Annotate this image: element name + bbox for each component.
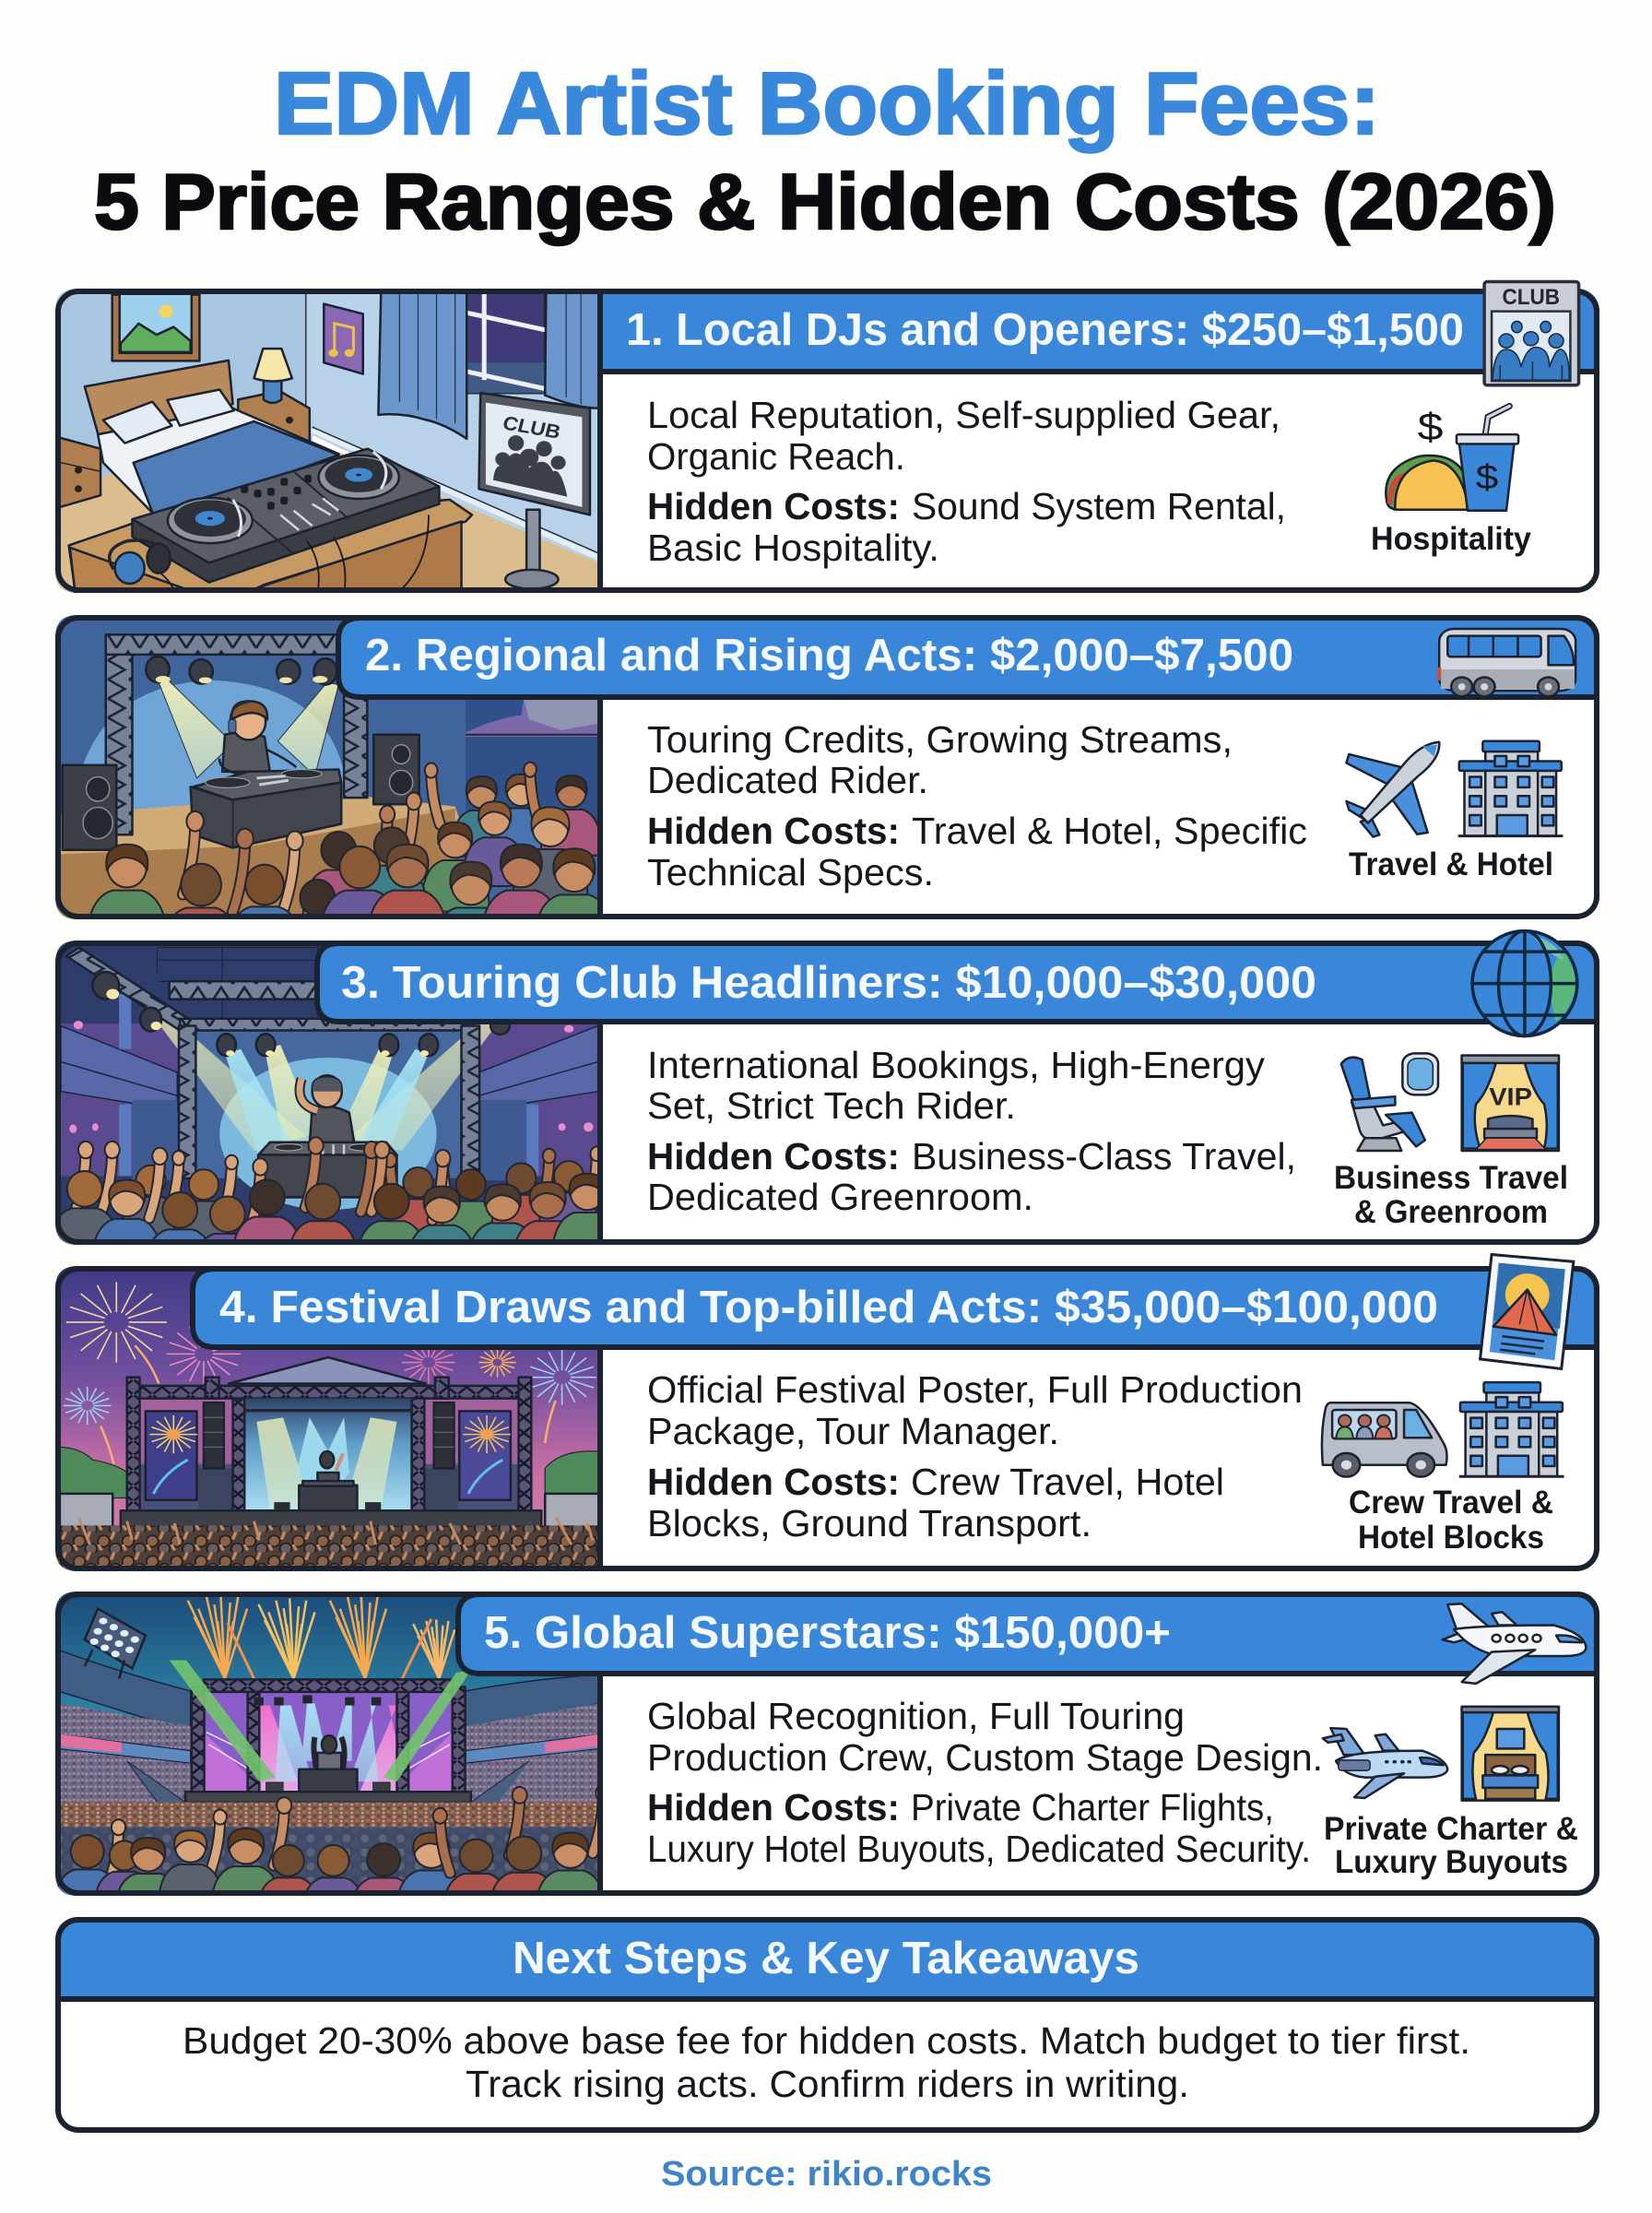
icon: VIP greenroom: VIP <box>1489 1083 1532 1111</box>
label: crew travel and hotel blocks: Hotel Blocks <box>1358 1520 1544 1556</box>
icon: white jet <box>1443 1604 1586 1684</box>
icon: hotel blocks <box>1459 1382 1564 1476</box>
description <box>647 1695 1323 1870</box>
icon: VIP greenroom <box>1462 1056 1559 1151</box>
icon: festival poster <box>1481 1254 1574 1368</box>
icon: airplane <box>1346 742 1439 837</box>
outline <box>58 1920 1597 2130</box>
panel: tier 1 local DJs <box>53 281 1604 607</box>
source: Source: rikio.rocks <box>661 2155 992 2194</box>
label: travel and hotel: Travel & Hotel <box>1349 846 1553 882</box>
label: private charter and luxury buyouts: Luxury Buyouts <box>1335 1844 1568 1880</box>
description: Touring Credits, Growing Streams, <box>647 718 1233 761</box>
divider and outline <box>58 291 1597 593</box>
description: Luxury Hotel Buyouts, Dedicated Security. <box>647 1828 1311 1870</box>
description: Blocks, Ground Transport. <box>647 1502 1092 1544</box>
description: Crew Travel, Hotel <box>911 1461 1224 1503</box>
icon: hospitality taco and drink <box>1386 405 1518 511</box>
icon: hospitality taco and drink: $ <box>1476 458 1499 496</box>
icon: globe <box>1472 931 1577 1036</box>
description: Travel & Hotel, Specific <box>912 810 1307 852</box>
heading: 1. Local DJs and Openers: $250–$1,500 <box>626 305 1464 355</box>
panel: next steps and key takeaways <box>51 1913 1604 2133</box>
description: Production Crew, Custom Stage Design. <box>647 1736 1323 1779</box>
description: Hidden Costs: <box>647 485 900 527</box>
label: hospitality: Hospitality <box>1371 521 1532 557</box>
description: Package, Tour Manager. <box>647 1410 1059 1452</box>
header pill <box>193 1269 1609 1347</box>
description: Basic Hospitality. <box>647 527 939 569</box>
label: business travel and greenroom <box>1334 1160 1568 1230</box>
heading: Next Steps & Key Takeaways <box>513 1934 1139 1983</box>
panel: tier 3 touring club headliners <box>55 929 1599 1245</box>
icon: luxury room <box>1462 1707 1559 1801</box>
heading: 2. Regional and Rising Acts: $2,000–$7,500 <box>365 631 1293 680</box>
header pill <box>458 1594 1609 1674</box>
description <box>647 1368 1303 1544</box>
heading: 4. Festival Draws and Top-billed Acts: $35,000–$100,000 <box>219 1283 1438 1332</box>
panel: tier 4 festival draws <box>53 1254 1609 1579</box>
illustration: club stage with lights <box>55 941 597 1245</box>
description: Dedicated Rider. <box>647 759 928 801</box>
label: crew travel and hotel blocks <box>1349 1485 1553 1556</box>
icon: crew van <box>1322 1402 1447 1477</box>
header pill <box>317 943 1609 1022</box>
divider and outline <box>58 1269 1597 1571</box>
label: business travel and greenroom: & Greenroom <box>1354 1194 1548 1230</box>
takeaways text: Budget 20-30% above base fee for hidden costs. Match budget to tier first. <box>183 2019 1470 2062</box>
header bar <box>51 1913 1604 1999</box>
divider and outline <box>58 1594 1597 1896</box>
icon: hotel <box>1458 741 1563 836</box>
divider and outline <box>58 943 1597 1245</box>
description <box>647 394 1286 569</box>
description: Official Festival Poster, Full Production <box>647 1368 1303 1411</box>
illustration: small stage with DJ and crowd <box>55 615 597 919</box>
label: private charter and luxury buyouts <box>1324 1811 1578 1880</box>
icon: hospitality taco and drink: $ <box>1418 405 1443 448</box>
heading: 5. Global Superstars: $150,000+ <box>484 1608 1171 1658</box>
illustration: bedroom DJ setup <box>53 284 603 607</box>
description: Local Reputation, Self-supplied Gear, <box>647 394 1280 436</box>
icon: club sign <box>1484 281 1579 385</box>
heading: 3. Touring Club Headliners: $10,000–$30,000 <box>341 958 1316 1008</box>
illustration: bedroom DJ setup: CLUB <box>501 412 563 443</box>
header pill <box>338 618 1609 697</box>
description <box>647 1044 1296 1218</box>
description: Hidden Costs: <box>647 1135 900 1178</box>
description: Private Charter Flights, <box>911 1786 1274 1828</box>
takeaways text: Track rising acts. Confirm riders in writing. <box>466 2063 1189 2105</box>
description: Technical Specs. <box>647 851 934 893</box>
label: private charter and luxury buyouts: Private Charter & <box>1324 1811 1578 1847</box>
description <box>647 718 1307 893</box>
takeaways text <box>183 2019 1470 2105</box>
divider and outline <box>58 618 1597 919</box>
description: Business-Class Travel, <box>912 1135 1296 1178</box>
description: Organic Reach. <box>647 435 905 478</box>
icon: tour bus <box>1439 629 1575 696</box>
header bar <box>600 286 1604 372</box>
description: Sound System Rental, <box>912 485 1286 527</box>
panel: tier 5 global superstars <box>55 1592 1599 1896</box>
title: 5 Price Ranges & Hidden Costs (2026) <box>94 159 1556 246</box>
label: business travel and greenroom: Business Travel <box>1334 1160 1568 1196</box>
icon: business seat and window <box>1341 1053 1438 1151</box>
illustration: stadium show <box>55 1592 597 1896</box>
description: International Bookings, High-Energy <box>647 1044 1266 1086</box>
description: Hidden Costs: <box>647 810 900 852</box>
description: Dedicated Greenroom. <box>647 1176 1033 1218</box>
title: EDM Artist Booking Fees: <box>274 54 1380 153</box>
panel: tier 2 regional acts <box>55 615 1599 919</box>
title <box>94 54 1556 246</box>
illustration: festival stage with fireworks <box>53 1265 603 1579</box>
description: Set, Strict Tech Rider. <box>647 1084 1016 1127</box>
description: Global Recognition, Full Touring <box>647 1695 1185 1737</box>
description: Hidden Costs: <box>647 1461 900 1503</box>
description: Hidden Costs: <box>647 1786 900 1828</box>
label: crew travel and hotel blocks: Crew Travel & <box>1349 1485 1553 1521</box>
icon: club sign: CLUB <box>1502 284 1560 309</box>
icon: private charter plane <box>1323 1728 1447 1798</box>
